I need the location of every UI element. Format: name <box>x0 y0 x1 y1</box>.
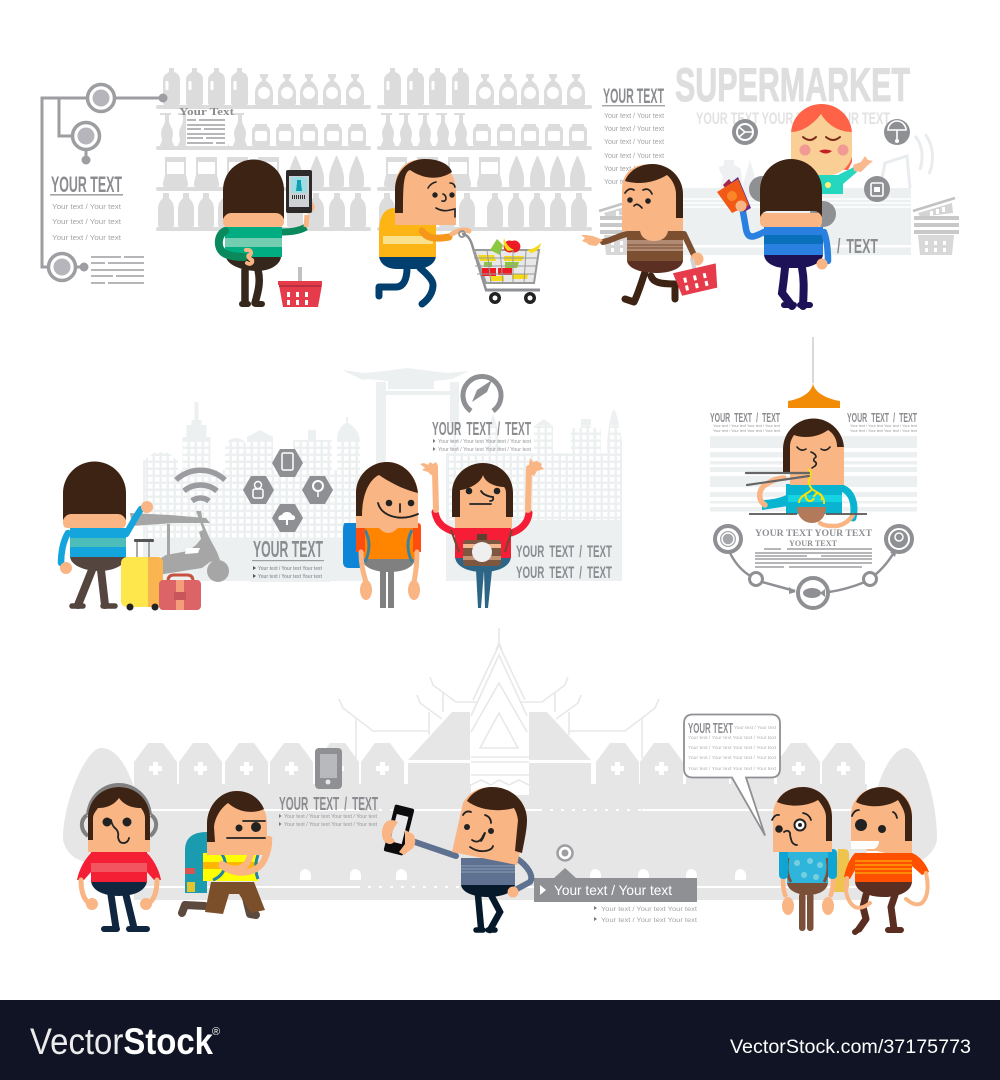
text block: left heading: Your text / Your text <box>52 219 121 226</box>
callout: speech bubble <box>684 714 780 836</box>
text block: shelf side list: Your text / Your text <box>604 139 664 146</box>
character: blue shirt paying <box>743 159 828 306</box>
wordmark: VectorStock <box>30 1021 213 1062</box>
callout: speech bubble: Your text / Your text <box>734 725 777 730</box>
character: brown shirt with basket <box>581 164 704 302</box>
icon: phone <box>315 748 342 789</box>
icon: money held <box>717 177 751 213</box>
flow diagram left <box>42 84 168 283</box>
shelf unit right <box>379 68 590 229</box>
icon: hexagon set <box>243 449 333 532</box>
text block: city heading: Your text / Your text Your text <box>258 566 322 572</box>
checkout counter: / TEXT <box>837 236 878 258</box>
icon: hanging lamp <box>788 337 840 408</box>
icon: compass <box>463 377 501 411</box>
heading: supermarket: YOUR TEXT YOUR TEXT YOUR TEXT <box>696 109 890 128</box>
text block: temple left: YOUR TEXT / TEXT <box>279 794 378 814</box>
character: yellow shirt with trolley <box>379 159 469 304</box>
icon: round grey badges <box>732 119 910 227</box>
callout: speech bubble: Your text / Your text Your text / Your text <box>688 745 777 750</box>
panel: noodle restaurant <box>710 337 918 608</box>
character: yellow vest running <box>182 791 269 915</box>
text block: your text on shelf: Your Text <box>179 107 235 118</box>
character: red shirt with camera <box>420 458 544 608</box>
text block: city top right: Your text / Your text Your text / Your text <box>438 439 532 445</box>
text block: shelf side list: Your text / Your text <box>604 153 664 160</box>
text block: shelf side list: YOUR TEXT <box>603 85 664 108</box>
shelf unit left <box>158 68 369 229</box>
heading: supermarket <box>675 58 910 128</box>
icon: red basket on floor <box>278 267 322 307</box>
character: blue striped backpacker from behind <box>60 462 153 606</box>
icon: wifi <box>176 470 225 501</box>
panel: travel city scene <box>60 368 622 610</box>
text block: shelf side list: Your text / Your text <box>604 126 664 133</box>
text block: city bottom right: YOUR TEXT / TEXT <box>516 563 612 582</box>
character: orange shirt talking <box>844 787 929 932</box>
text blocks: noodle headings: YOUR TEXT / TEXT <box>847 410 917 425</box>
callout: grey label bar: Your text / Your text Your text <box>601 917 697 924</box>
callout: speech bubble: Your text / Your text Your text / Your text <box>688 766 777 771</box>
text block: noodle centre: YOUR TEXT <box>789 539 838 548</box>
footer image id: VectorStock.com/37175773 <box>730 1037 971 1058</box>
checkout counter <box>683 134 932 258</box>
text block: your text on shelf <box>179 107 235 146</box>
character: selfie taker <box>382 787 531 930</box>
text block: city heading <box>252 536 324 580</box>
text block: city top right: YOUR TEXT / TEXT <box>432 419 531 439</box>
callout: speech bubble: Your text / Your text Your text / Your text <box>688 735 777 740</box>
text blocks: noodle headings: Your text / Your text Your text / Your text <box>713 429 781 433</box>
basket stacks <box>599 198 959 255</box>
text block: temple left <box>279 794 378 828</box>
text block: left heading <box>50 172 123 242</box>
text block: city top right: Your text / Your text Your text / Your text <box>438 447 532 453</box>
text blocks: noodle headings <box>710 410 918 433</box>
icon: shopping trolley <box>459 231 541 304</box>
text block: city top right <box>432 419 532 453</box>
gate and skyline background <box>143 368 622 582</box>
text blocks: noodle headings: YOUR TEXT / TEXT <box>710 410 780 425</box>
icon: red basket carried <box>671 254 721 297</box>
callout: grey label bar: Your text / Your text <box>554 882 672 898</box>
panel: temple scene <box>63 628 937 932</box>
icon: suitcases <box>121 539 201 610</box>
callout: speech bubble: YOUR TEXT <box>688 720 733 737</box>
text blocks: noodle headings: Your text / Your text Your text / Your text <box>850 424 918 428</box>
text block: city bottom right <box>516 542 612 582</box>
table line <box>749 513 867 515</box>
character: orange backpacker <box>343 462 421 608</box>
callout: grey label bar <box>534 846 697 924</box>
callout: grey label bar: Your text / Your text Your text <box>601 906 697 913</box>
text block: noodle centre <box>755 529 873 567</box>
callout: speech bubble: Your text / Your text Your text / Your text <box>688 755 777 760</box>
character: green shirt scanning phone <box>219 159 314 304</box>
text block: shelf side list: Your text / Your text <box>604 179 664 186</box>
character: cashier <box>791 104 873 194</box>
striped backdrop <box>710 436 917 512</box>
text block: shelf side list: Your text / Your text <box>604 113 664 120</box>
text block: noodle centre: YOUR TEXT YOUR TEXT <box>755 529 873 539</box>
character: monocle and backpack <box>772 787 849 931</box>
text block: city heading: YOUR TEXT <box>253 536 323 562</box>
panel: supermarket scene <box>42 58 959 307</box>
text block: temple left: Your text / Your text Your text / Your text <box>284 822 378 828</box>
character: person eating noodles <box>746 419 854 526</box>
temple background <box>63 628 937 900</box>
icon: tuk tuk <box>130 511 229 582</box>
character: headphones <box>77 785 161 929</box>
wordmark: ® <box>212 1026 220 1038</box>
footer bar <box>0 1000 1000 1080</box>
flow diagram: noodle ingredients <box>715 526 912 608</box>
text block: temple left: Your text / Your text Your text / Your text <box>284 814 378 820</box>
text block: city heading: Your text / Your text Your text <box>258 574 322 580</box>
text blocks: noodle headings: Your text / Your text Your text / Your text <box>713 424 781 428</box>
text block: shelf side list <box>602 85 665 186</box>
text block: left heading: Your text / Your text <box>52 204 121 211</box>
text block: city bottom right: YOUR TEXT / TEXT <box>516 542 612 561</box>
text block: left heading: Your text / Your text <box>52 235 121 242</box>
text block: shelf side list: Your text / Your text <box>604 166 664 173</box>
text block: left heading: YOUR TEXT <box>51 172 122 197</box>
text blocks: noodle headings: Your text / Your text Your text / Your text <box>850 429 918 433</box>
